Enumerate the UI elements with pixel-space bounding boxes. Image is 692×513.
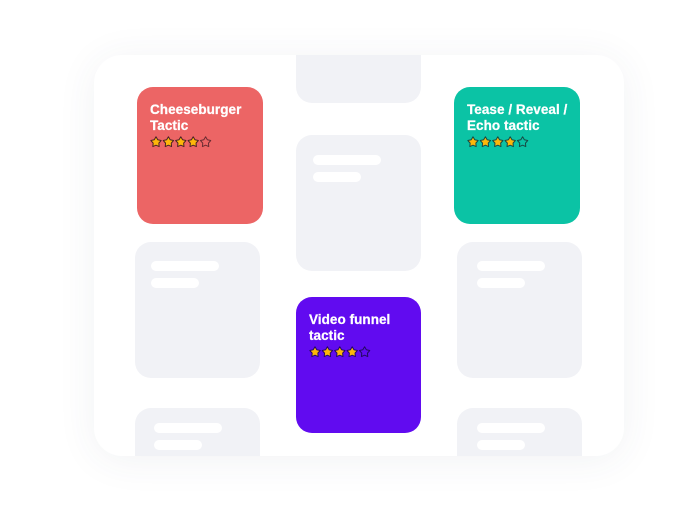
card title: Tactic (150, 118, 188, 133)
placeholder line short (154, 440, 202, 450)
card title: Video funnel (309, 312, 390, 327)
placeholder card: right column middle (457, 242, 582, 378)
placeholder card: right column bottom (457, 408, 582, 456)
card title (308, 312, 390, 343)
placeholder line short (151, 278, 199, 288)
placeholder line long (313, 155, 381, 165)
placeholder card: left column middle (135, 242, 260, 378)
placeholder line short (313, 172, 361, 182)
star rating: 4 of 5 (309, 346, 370, 358)
card title (467, 102, 568, 133)
placeholder line long (151, 261, 219, 271)
card title: Cheeseburger (150, 102, 241, 117)
star rating: 4 of 5 (467, 136, 528, 148)
card title (150, 102, 242, 133)
card: Cheeseburger Tactic (137, 87, 263, 224)
placeholder line long (477, 423, 545, 433)
card title: Tease / Reveal / (467, 102, 567, 117)
placeholder line long (154, 423, 222, 433)
placeholder card: middle column center (296, 135, 421, 271)
star rating: 4 of 5 (150, 136, 212, 148)
card title: Echo tactic (467, 118, 540, 133)
placeholder card: middle column top (296, 55, 421, 103)
panel: main white board (94, 55, 624, 456)
card: Tease / Reveal / Echo tactic (454, 87, 580, 224)
placeholder line short (477, 278, 525, 288)
placeholder line short (477, 440, 525, 450)
placeholder line long (477, 261, 545, 271)
card: Video funnel tactic (296, 297, 421, 433)
placeholder card: left column bottom (135, 408, 260, 456)
card title: tactic (309, 328, 345, 343)
